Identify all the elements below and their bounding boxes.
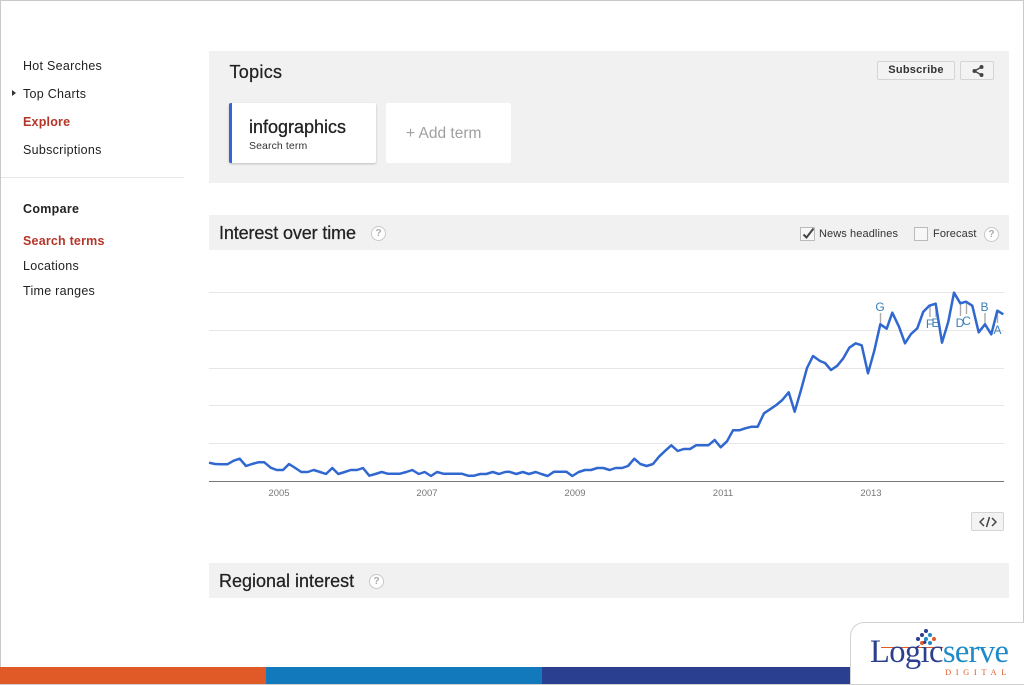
nav: Locations: Locations [23,259,79,273]
button: subscribe: Subscribe [888,64,944,76]
x axis year labels: 2013 [860,488,882,499]
nav: Hot Searches: Hot Searches [23,59,102,73]
label: forecast: Forecast [933,228,977,240]
annotation letters: F [926,317,933,331]
bar segment: blue [266,667,542,684]
button: subscribe [877,61,955,80]
heading: Compare: Compare [23,202,79,216]
icon: check mark [802,228,814,239]
nav: Search terms: Search terms [23,234,105,248]
annotation letters: B [980,300,989,314]
footer colour bar [0,667,850,685]
x axis year labels [268,488,882,499]
x axis year labels: 2011 [713,488,733,499]
heading: Regional interest: Regional interest [219,571,354,591]
icon: forecast help: ? [988,229,995,240]
annotation letters: G [875,300,885,314]
annotation letters: D [956,316,965,330]
x axis year labels: 2007 [416,488,438,499]
bar segment: orange [0,667,266,684]
x axis year labels: 2009 [564,488,586,499]
panel: interest over time header [209,215,1009,250]
add term label: + Add term [406,125,481,142]
button: share [960,61,994,80]
annotation letters: E [931,316,940,330]
sidebar navigation [1,59,184,298]
x axis year labels: 2005 [268,488,290,499]
icon: share [972,65,984,77]
icon: forecast help [984,227,999,242]
logo tagline: DIGITAL [945,667,1011,677]
annotation letters [875,300,1002,337]
heading: Topics: Topics [230,62,282,82]
icon: help [371,226,386,241]
nav: Time ranges: Time ranges [23,284,95,298]
button: embed [971,512,1004,531]
icon: help: ? [375,228,382,239]
annotation letters: A [993,323,1002,337]
bar segment: navy [542,667,851,684]
card: add term [386,103,511,163]
nav: Explore: Explore [23,115,70,129]
term type: Search term [249,140,307,152]
data line: infographics [209,293,1003,476]
term name: infographics [249,117,346,137]
card: infographics term [229,103,376,163]
checkbox: news headlines [800,227,815,241]
checkbox: forecast [914,227,928,241]
heading: Interest over time: Interest over time [219,223,356,243]
icon: help: ? [373,576,380,587]
logo panel: Logicserve Digital [850,622,1024,685]
annotation stems [880,302,998,324]
nav: Subscriptions: Subscriptions [23,143,102,157]
annotation letters: C [962,314,971,328]
icon: code brackets [979,516,997,528]
logo dots [916,629,936,645]
logo wordmark: Logicserve [870,634,1008,670]
logo rule [881,647,943,648]
nav: Top Charts: Top Charts [23,87,86,101]
panel: regional interest header [209,563,1009,598]
icon: selected arrow [12,90,16,96]
icon: help [369,574,384,589]
label: news headlines: News headlines [819,228,898,240]
panel: topics [209,51,1009,183]
